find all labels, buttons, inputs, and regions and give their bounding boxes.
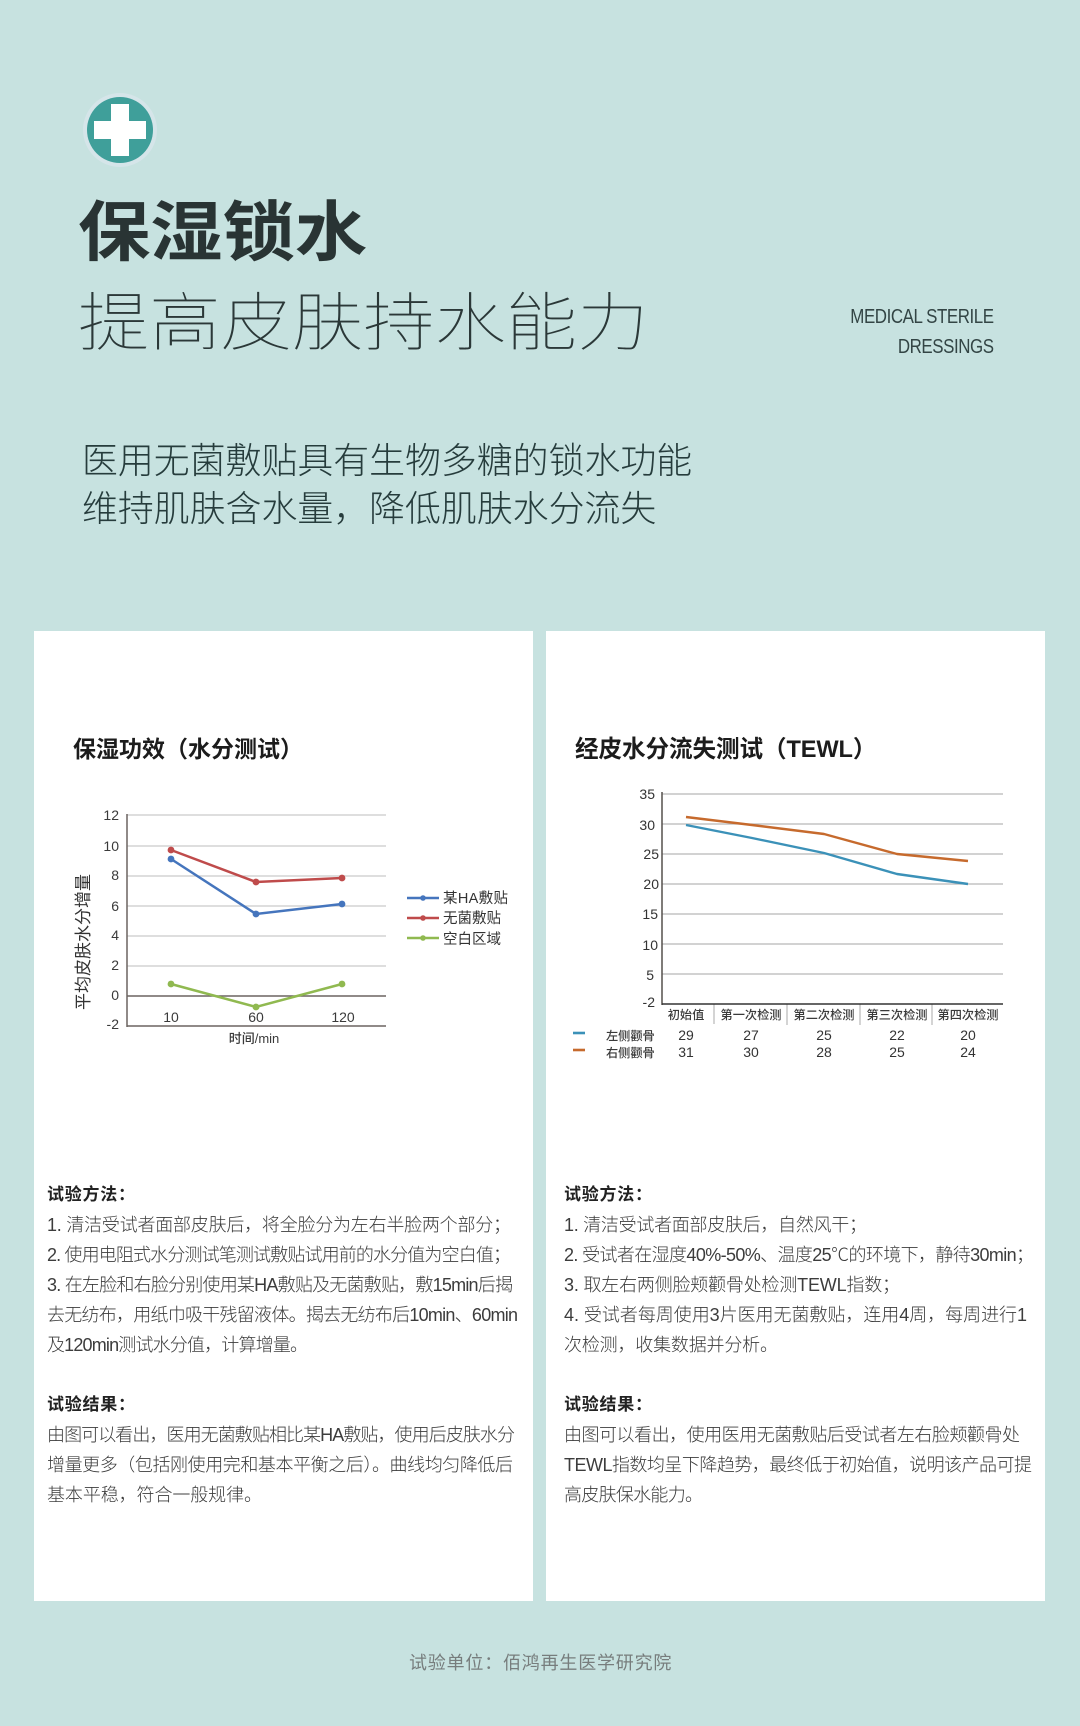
y axis ticks: 10 <box>642 937 658 953</box>
text: right result: 试验结果： <box>564 1394 652 1414</box>
text: left method: 1. 清洁受试者面部皮肤后，将全脸分为左右半脸两个部分； <box>47 1215 511 1235</box>
text: right method: 2. 受试者在湿度40%-50%、温度25℃的环境下，静待30min； <box>564 1245 1034 1265</box>
table values: 22 <box>889 1027 905 1043</box>
y axis ticks: 15 <box>642 906 658 922</box>
text: right method: 1. 清洁受试者面部皮肤后，自然风干； <box>564 1215 867 1235</box>
text: left result: 试验结果： <box>47 1394 135 1414</box>
category labels: 初始值 <box>668 1007 704 1022</box>
intro text: 维持肌肤含水量，降低肌肤水分流失 <box>82 489 656 529</box>
table values: 20 <box>960 1027 976 1043</box>
table row labels: 左侧颧骨 <box>606 1028 655 1043</box>
text: right method: 试验方法： <box>564 1184 652 1204</box>
y axis ticks: 30 <box>639 817 655 833</box>
table row labels: 右侧颧骨 <box>606 1045 655 1060</box>
y axis ticks: 12 <box>103 807 119 823</box>
category labels: 第一次检测 <box>721 1007 781 1022</box>
x axis ticks: 120 <box>331 1009 355 1025</box>
table values: 31 <box>678 1044 694 1060</box>
y axis ticks: -2 <box>107 1016 119 1032</box>
text: right result <box>564 1394 1032 1505</box>
y axis ticks: -2 <box>643 994 655 1010</box>
y axis ticks: 8 <box>111 867 119 883</box>
panel: TEWL test <box>546 631 1045 1601</box>
english label: MEDICAL STERILE <box>851 306 994 328</box>
title: 保湿锁水 <box>78 197 367 269</box>
y axis ticks: 5 <box>646 967 654 983</box>
text: right result: 高皮肤保水能力。 <box>564 1485 703 1505</box>
category labels: 第三次检测 <box>867 1007 927 1022</box>
line chart: TEWL <box>573 786 1003 1060</box>
text: left method: 试验方法： <box>47 1184 135 1204</box>
intro text <box>82 441 692 529</box>
legend <box>407 890 508 948</box>
subtitle: 提高皮肤持水能力 <box>78 288 648 359</box>
category labels: 第二次检测 <box>794 1007 854 1022</box>
text: left result: 基本平稳，符合一般规律。 <box>47 1485 262 1505</box>
table values: 30 <box>743 1044 759 1060</box>
text: left result: 增量更多（包括刚使用完和基本平衡之后）。曲线均匀降低后 <box>47 1455 513 1475</box>
english label: DRESSINGS <box>898 336 994 358</box>
english label <box>851 306 994 358</box>
heading: TEWL test: 经皮水分流失测试（TEWL） <box>575 737 876 763</box>
x axis ticks: 60 <box>248 1009 264 1025</box>
category labels <box>668 1007 998 1022</box>
category labels: 第四次检测 <box>938 1007 998 1022</box>
text: right result: TEWL指数均呈下降趋势，最终低于初始值，说明该产品可提 <box>564 1455 1032 1475</box>
table values: 25 <box>816 1027 832 1043</box>
text: right method: 4. 受试者每周使用3片医用无菌敷贴，连用4周，每周进行1 <box>564 1305 1027 1325</box>
y axis title: 平均皮肤水分增量 <box>74 874 93 1010</box>
y axis ticks: 20 <box>643 876 659 892</box>
y axis ticks: 0 <box>111 987 119 1003</box>
text: left method: 2. 使用电阻式水分测试笔测试敷贴试用前的水分值为空白值； <box>47 1245 511 1265</box>
footer: 试验单位：佰鸿再生医学研究院 <box>409 1653 672 1673</box>
text: left method: 3. 在左脸和右脸分别使用某HA敷贴及无菌敷贴，敷15min后揭 <box>47 1275 513 1295</box>
table values: 27 <box>743 1027 759 1043</box>
x axis ticks <box>163 1009 355 1025</box>
series lines <box>686 817 968 884</box>
legend: 某HA敷贴 <box>443 890 508 907</box>
x axis ticks: 10 <box>163 1009 179 1025</box>
icon: medical cross badge <box>83 93 157 167</box>
text: right method: 次检测，收集数据并分析。 <box>564 1335 778 1355</box>
y axis ticks: 10 <box>103 838 119 854</box>
text: right method <box>564 1184 1034 1355</box>
table row labels <box>606 1028 655 1060</box>
text: right method: 3. 取左右两侧脸颊颧骨处检测TEWL指数； <box>564 1275 900 1295</box>
line chart: moisture increase <box>74 807 508 1046</box>
y axis ticks: 4 <box>111 927 119 943</box>
text: left method: 及120min测试水分值，计算增量。 <box>47 1335 308 1355</box>
x axis title: 时间/min <box>229 1031 279 1046</box>
table values: 29 <box>678 1027 694 1043</box>
text: right result: 由图可以看出，使用医用无菌敷贴后受试者左右脸颊颧骨处 <box>564 1425 1020 1445</box>
intro text: 医用无菌敷贴具有生物多糖的锁水功能 <box>82 441 692 481</box>
table values: 25 <box>889 1044 905 1060</box>
text: left result <box>47 1394 515 1505</box>
legend: 无菌敷贴 <box>443 910 501 927</box>
series lines <box>171 850 342 1007</box>
text: left method: 去无纺布，用纸巾吸干残留液体。揭去无纺布后10min、60min <box>47 1305 518 1325</box>
text: left method <box>47 1184 518 1355</box>
y axis ticks: 25 <box>643 846 659 862</box>
y axis ticks: 6 <box>111 898 119 914</box>
text: left result: 由图可以看出，医用无菌敷贴相比某HA敷贴，使用后皮肤水分 <box>47 1425 515 1445</box>
panel: moisture test <box>34 631 533 1601</box>
legend: 空白区域 <box>443 931 501 948</box>
y axis ticks <box>639 786 659 1010</box>
table values <box>678 1027 976 1060</box>
table values: 24 <box>960 1044 976 1060</box>
y axis ticks: 2 <box>111 957 119 973</box>
y axis ticks: 35 <box>639 786 655 802</box>
heading: moisture test: 保湿功效（水分测试） <box>73 736 303 762</box>
y axis ticks <box>103 807 119 1032</box>
table values: 28 <box>816 1044 832 1060</box>
